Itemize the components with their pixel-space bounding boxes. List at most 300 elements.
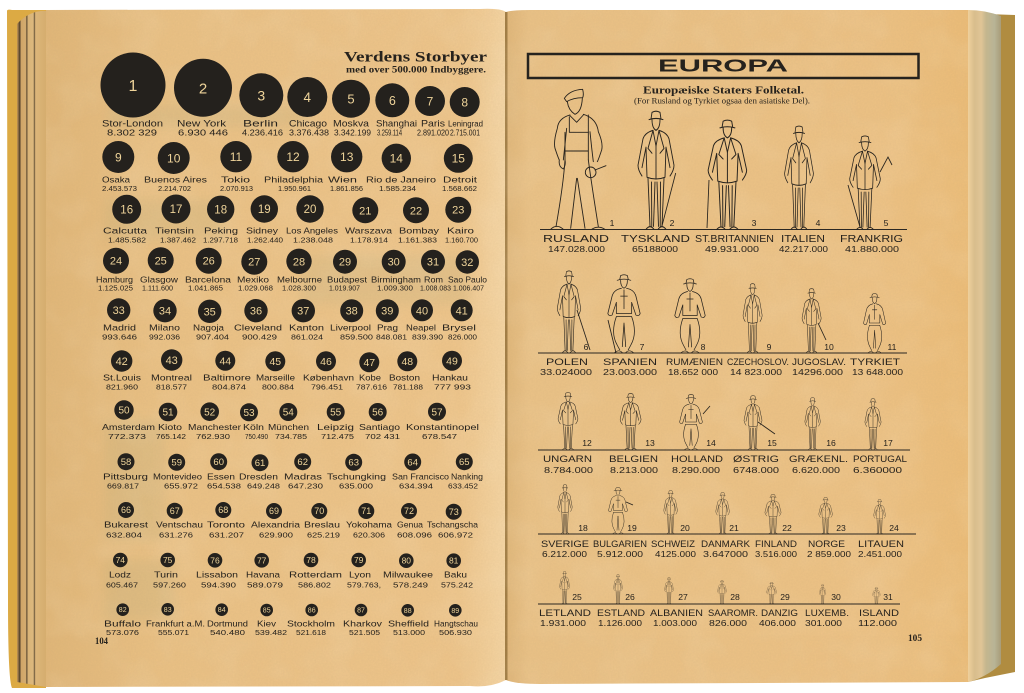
city 58: Pittsburg (103, 471, 148, 481)
country 8: Rumænien (666, 279, 723, 377)
ground lines under figure rows (538, 230, 916, 604)
city 77 (246, 553, 283, 589)
city 9: 9 (115, 150, 122, 164)
left page leaf stack (17, 11, 46, 687)
city 37 (289, 299, 324, 341)
country 15: Østrig (733, 396, 779, 475)
panel: world cities row 5 (102, 298, 477, 341)
city 10 (144, 142, 207, 193)
country 21: Danmark: 21 (729, 523, 739, 533)
city 44 (203, 351, 251, 391)
city 36 (234, 299, 282, 341)
city 75: 597.260 (153, 580, 186, 589)
city 21: 1.178.914 (350, 236, 388, 244)
city 1: 8.302 329 (107, 128, 157, 138)
heading: Verdens Storbyer: med over 500.000 Indbyggere. (346, 64, 486, 74)
city 78 (289, 553, 342, 589)
city 83 (146, 603, 205, 637)
country 30: Luxemburg: 301.000 (805, 618, 842, 628)
country 29: Danzig: 29 (780, 592, 790, 602)
city 6: 6 (389, 94, 396, 108)
city 83: 555.071 (158, 628, 189, 637)
city 69: Alexandria (251, 519, 300, 529)
country 25: Letland: LETLAND (539, 608, 592, 618)
city 8: 2.715.001 (450, 128, 480, 138)
city 20: 20 (304, 204, 316, 216)
city 51: 765.142 (156, 432, 186, 441)
city 5: 5 (347, 92, 355, 106)
city 4 (287, 77, 329, 138)
country 23: Norge: 2 859.000 (807, 549, 851, 559)
city 87 (343, 604, 383, 637)
country 20: Schweiz: SCHWEIZ (651, 539, 696, 549)
country 13: Belgien: BELGIEN (609, 454, 658, 464)
country 21: Danmark (701, 492, 750, 559)
city 21: 21 (359, 205, 371, 217)
country 30: Luxemburg: 30 (831, 592, 841, 602)
city 50: 772.373 (108, 432, 146, 441)
country 13: Belgien (609, 394, 658, 475)
city 62: 62 (297, 457, 308, 468)
city 45: 800.884 (262, 382, 294, 391)
city 72 (397, 503, 432, 539)
country 7: Spanien: 23.003.000 (603, 367, 657, 377)
city 17: 17 (170, 204, 182, 216)
city 28 (277, 249, 322, 292)
city 85: 539.482 (255, 628, 287, 637)
city 55: 712.475 (321, 432, 354, 441)
city 10: Buenos Aires (144, 175, 207, 185)
country 31: Island (858, 587, 900, 628)
country 17: Portugal: 17 (883, 438, 893, 448)
city 69: 69 (269, 506, 279, 516)
country 18: Sverige (541, 484, 589, 559)
city 13 (328, 141, 363, 193)
city 65: 633.452 (448, 481, 478, 490)
panel: population figures row 2 (540, 271, 903, 377)
city 46: 46 (320, 356, 332, 368)
country 12: Ungarn: UNGARN (543, 454, 592, 464)
city 63: 635.000 (339, 481, 373, 490)
city 15: Detroit (443, 175, 478, 185)
city 25: 1.111.600 (142, 283, 173, 292)
country 2: Tyskland: 65188000 (632, 244, 678, 254)
city 6 (375, 83, 417, 138)
city 76: Lissabon (196, 569, 238, 579)
country 1: Rusland: 147.028.000 (548, 244, 605, 254)
city 59: Montevideo (153, 471, 202, 481)
city 82: Buffalo (104, 619, 141, 629)
heading: Verdens Storbyer (344, 50, 487, 74)
country 19: Bulgarien: 5.912.000 (597, 549, 643, 559)
country 23: Norge: NORGE (808, 539, 845, 549)
city 84: 540.480 (210, 628, 245, 637)
country 17: Portugal (853, 399, 907, 475)
city 7 (415, 86, 449, 138)
city 27: 27 (248, 257, 260, 269)
country 1: Rusland: 1 (610, 218, 615, 228)
city 11: 11 (230, 150, 243, 164)
city 22 (398, 197, 440, 244)
city 42: 42 (116, 356, 128, 368)
city 77: 77 (257, 555, 267, 565)
city 32: 32 (461, 257, 473, 269)
city 60: 654.538 (207, 481, 241, 490)
city 87: Kharkov (343, 619, 383, 629)
city 15: 15 (452, 152, 465, 166)
city 37: 37 (297, 306, 309, 318)
city 63: Tschungking (327, 471, 386, 481)
city 11 (220, 141, 253, 193)
city 50 (102, 400, 155, 441)
country 24: Litauen: LITAUEN (858, 539, 904, 549)
city 24: Hamburg (96, 274, 133, 284)
country 17: Portugal: PORTUGAL (853, 454, 907, 464)
city 71: Yokohama (346, 519, 392, 529)
city 29: 29 (339, 257, 351, 269)
subheading: Europæiske Staters Folketal: (For Rusland og Tyrkiet ogsaa den asiatiske Del). (634, 97, 810, 106)
panel: world cities row 11 (104, 603, 478, 637)
city 13: Wien (328, 175, 358, 185)
city 44: 804.874 (212, 382, 246, 391)
city 32 (448, 250, 487, 292)
city 36: 36 (250, 306, 262, 318)
city 42 (103, 350, 141, 391)
city 71: 620.306 (353, 530, 385, 539)
city 6: Shanghai (376, 119, 417, 130)
city 11: 2.070.913 (220, 184, 253, 193)
city 52: Manchester (188, 422, 241, 432)
country 25: Letland (539, 571, 592, 628)
country 26: Estland: 26 (625, 592, 635, 602)
city 40: 839.390 (412, 332, 443, 341)
city 18: 18 (214, 204, 227, 216)
gutter shadow (505, 12, 508, 680)
country 14: Holland: 14 (706, 438, 716, 448)
city 82 (104, 603, 141, 637)
city 75: Turin (154, 569, 178, 579)
country 13: Belgien: 13 (645, 438, 655, 448)
city 20: 1.238.048 (293, 236, 333, 244)
country 1: Rusland: RUSLAND (543, 234, 609, 245)
city 83: Frankfurt a.M. (146, 619, 205, 629)
city 7: 7 (427, 94, 434, 108)
country 14: Holland (671, 395, 724, 475)
city 70: Breslau (304, 519, 340, 529)
city 3: 3 (257, 88, 265, 104)
city 49 (432, 351, 471, 391)
city 41: Brysel (442, 323, 476, 333)
country 9: Czechoslovakiet: 9 (767, 342, 772, 352)
city 2: 2 (199, 80, 207, 98)
panel: population figures row 1 (543, 89, 903, 254)
city 43: Montreal (151, 372, 192, 382)
city 48: 781.188 (393, 382, 423, 391)
country 29: Danzig: 406.000 (759, 618, 796, 628)
city 64: San Francisco (392, 471, 449, 481)
country 24: Litauen: 2.451.000 (858, 549, 902, 559)
city 42: St.Louis (103, 372, 141, 382)
country 4: Italien: 4 (816, 218, 821, 228)
city 36: Cleveland (234, 323, 282, 333)
city 34 (149, 299, 180, 341)
country 26: Estland (597, 574, 646, 628)
city 80: Milwaukee (383, 569, 433, 579)
city 33: Madrid (103, 323, 136, 333)
title box: EUROPA (528, 54, 918, 78)
city 38 (330, 299, 373, 341)
city 45: 45 (269, 356, 281, 368)
city 66 (104, 502, 149, 539)
city 34: 992.036 (149, 332, 180, 341)
panel: world cities row 6 (103, 349, 471, 391)
city 62 (284, 453, 323, 490)
city 9: Osaka (102, 175, 130, 185)
country 16: Grækenland (789, 398, 848, 475)
city 53 (240, 403, 268, 441)
country 28: Saaromraadet: 826.000 (709, 618, 747, 628)
country 9: Czechoslovakiet: 14 823.000 (730, 367, 782, 377)
city 79: 79 (354, 555, 364, 565)
city 14: 14 (390, 152, 403, 166)
city 69: 629.900 (259, 530, 293, 539)
city 80: 578.249 (393, 580, 428, 589)
city 48: 48 (401, 356, 413, 368)
city 41 (442, 299, 477, 341)
country 24: Litauen: 24 (889, 523, 899, 533)
country 8: Rumænien: 8 (701, 342, 706, 352)
country 17: Portugal: 6.360000 (853, 465, 902, 475)
page number 105: 105 (908, 633, 923, 643)
country 30: Luxemburg (805, 584, 849, 628)
city 3 (239, 73, 283, 138)
city 40: Neapel (406, 323, 436, 333)
city 37: 861.024 (291, 332, 323, 341)
city 56: Santiago (359, 422, 400, 432)
city 17: Tientsin (155, 225, 194, 235)
city 6: 3.259.114 (377, 128, 402, 138)
country 7: Spanien: 7 (640, 342, 645, 352)
city 24 (96, 248, 133, 292)
city 64: 64 (407, 457, 418, 468)
city 25: 25 (155, 255, 167, 267)
city 16: 1.485.582 (108, 236, 146, 244)
panel: world cities row 1 (100, 52, 483, 138)
city 54: 734.785 (275, 432, 307, 441)
country 19: Bulgarien: BULGARIEN (593, 539, 647, 549)
city 69 (251, 503, 300, 539)
city 57: 678.547 (422, 432, 457, 441)
country 8: Rumænien: RUMÆNIEN (666, 357, 723, 368)
city 44: Baltimore (203, 372, 251, 382)
city 78: 78 (306, 555, 316, 565)
country 2: Tyskland: TYSKLAND (621, 234, 690, 245)
country 16: Grækenland: GRÆKENL. (789, 454, 848, 464)
city 81 (441, 553, 473, 589)
city 2: New York (177, 119, 226, 130)
city 78: Rotterdam (289, 569, 342, 579)
city 31 (420, 250, 451, 292)
city 21 (345, 197, 392, 244)
city 20: Los Angeles (286, 225, 338, 235)
city 85: 85 (263, 608, 271, 614)
city 35 (193, 300, 229, 341)
country 11: Tyrkiet (850, 294, 903, 377)
city 50: Amsterdam (102, 422, 155, 432)
city 7: Paris (421, 119, 445, 130)
country 4: Italien: 42.217.000 (779, 244, 828, 254)
country 6: Polen (540, 271, 592, 377)
city 31: Rom (424, 274, 443, 284)
city 15: 1.568.662 (442, 184, 477, 193)
city 67: Ventschau (156, 519, 203, 529)
city 74: 74 (116, 555, 125, 565)
city 26 (185, 248, 231, 292)
city 5: 3.342.199 (334, 128, 371, 138)
book cover: right edge (968, 10, 1015, 682)
city 82: 82 (119, 607, 127, 614)
city 3: Berlin (243, 119, 278, 130)
city 88: Sheffield (388, 619, 429, 629)
city 70 (304, 503, 340, 539)
right page (506, 10, 968, 684)
country 27: Albanien: 27 (678, 592, 688, 602)
country 9: Czechoslovakiet (727, 284, 789, 377)
city 89: 89 (451, 608, 459, 615)
city 73 (427, 504, 478, 539)
city 7: 2.891.020 (417, 128, 449, 138)
city 89: Hangtschau (434, 619, 478, 629)
country 20: Schweiz: 4125.000 (655, 549, 696, 559)
country 21: Danmark: 3.647000 (703, 549, 748, 559)
panel: world cities row 9 (104, 502, 478, 539)
city 15 (442, 144, 478, 193)
city 26: 26 (203, 256, 215, 268)
city 80: 80 (402, 556, 411, 566)
city 12: Philadelphia (264, 175, 323, 185)
panel: world cities row 2 (102, 141, 478, 193)
country 19: Bulgarien: 19 (627, 523, 637, 533)
city 33: 993.646 (102, 332, 137, 341)
country 22: Finland (755, 494, 798, 559)
city 27 (237, 249, 273, 292)
country 4: Italien (779, 126, 828, 254)
city 29: 1.019.907 (329, 283, 360, 292)
subheading: Europæiske Staters Folketal (634, 86, 810, 106)
city 42: 821.960 (106, 382, 138, 391)
country 26: Estland: 1.126.000 (598, 618, 642, 628)
city 83: 83 (164, 607, 172, 614)
city 26: Barcelona (185, 274, 231, 284)
country 31: Island: 112.000 (858, 618, 897, 628)
country 8: Rumænien: 18.652 000 (668, 367, 718, 377)
city 58 (103, 453, 148, 490)
country 18: Sverige: 6.212.000 (542, 549, 587, 559)
city 28: 1.028.300 (282, 283, 316, 292)
city 72: Genua (397, 519, 423, 529)
city 28: 28 (293, 256, 305, 268)
country 1: Rusland (543, 89, 615, 254)
city 88 (388, 604, 429, 637)
city 45: Marseille (256, 372, 295, 382)
city 17 (155, 194, 196, 244)
city 24: 24 (110, 256, 122, 268)
country 10: Jugoslavien: JUGOSLAV. (792, 357, 846, 368)
city 79: Lyon (349, 569, 371, 579)
city 32: 1.006.407 (453, 283, 484, 292)
city 1 (100, 52, 166, 138)
city 43: 43 (166, 355, 178, 367)
country 2: Tyskland (621, 111, 690, 254)
city 17: 1.387.462 (160, 236, 196, 244)
city 77: Havana (246, 569, 280, 579)
city 45 (256, 351, 295, 391)
city 18: Peking (204, 225, 238, 235)
country 10: Jugoslavien: 14296.000 (792, 367, 843, 377)
city 35: 35 (204, 306, 216, 318)
city 19 (246, 195, 283, 244)
city 60: 60 (213, 457, 224, 468)
city 4: Chicago (289, 119, 327, 130)
city 89: 506.930 (439, 628, 472, 637)
country 5: Frankrig (840, 136, 903, 254)
country 7: Spanien (603, 275, 657, 377)
city 34: Milano (149, 323, 180, 333)
city 37: Kanton (289, 323, 324, 333)
city 31: 1.008.083 (420, 283, 451, 292)
city 50: 50 (118, 406, 130, 417)
panel: population figures row 4 (541, 484, 904, 559)
city 49: 49 (446, 356, 458, 368)
city 16 (103, 195, 147, 244)
city 24: 1.125.025 (98, 283, 133, 292)
city 33 (102, 298, 137, 341)
city 74 (106, 553, 138, 589)
city 66: 66 (121, 505, 131, 515)
country 13: Belgien: 8.213.000 (610, 465, 658, 475)
city 63 (327, 454, 386, 490)
city 71 (346, 503, 392, 539)
country 19: Bulgarien (593, 487, 647, 559)
city 62: Madras (284, 471, 322, 481)
panel: world cities row 3 (103, 194, 478, 244)
heading: Verdens Storbyer: Verdens Storbyer (344, 50, 487, 66)
city 2 (174, 59, 232, 138)
city 68: Toronto (207, 519, 245, 529)
country 6: Polen: 33.024000 (540, 367, 592, 377)
city 16: Calcutta (103, 225, 147, 235)
country 3: St. Britannien: 49.931.000 (705, 244, 759, 254)
city 31: 31 (427, 257, 439, 269)
city 60 (207, 453, 241, 490)
city 27: Mexiko (237, 274, 269, 284)
city 20 (286, 195, 338, 244)
city 30: Birmingham (371, 274, 421, 284)
panel: world cities row 4 (96, 247, 487, 292)
city 70: 625.219 (307, 530, 340, 539)
city 59 (153, 454, 202, 490)
country 31: Island: 31 (883, 592, 893, 602)
city 65 (448, 453, 483, 490)
country 28: Saaromraadet: SAAROMR. (708, 608, 758, 618)
city 53: Köln (243, 422, 264, 432)
city 25: Glasgow (140, 274, 179, 284)
city 48: Boston (389, 372, 420, 382)
country 11: Tyrkiet: TYRKIET (850, 357, 900, 368)
country 12: Ungarn (543, 393, 593, 475)
country 27: Albanien: 1.003.000 (653, 618, 697, 628)
city 54 (268, 403, 309, 441)
